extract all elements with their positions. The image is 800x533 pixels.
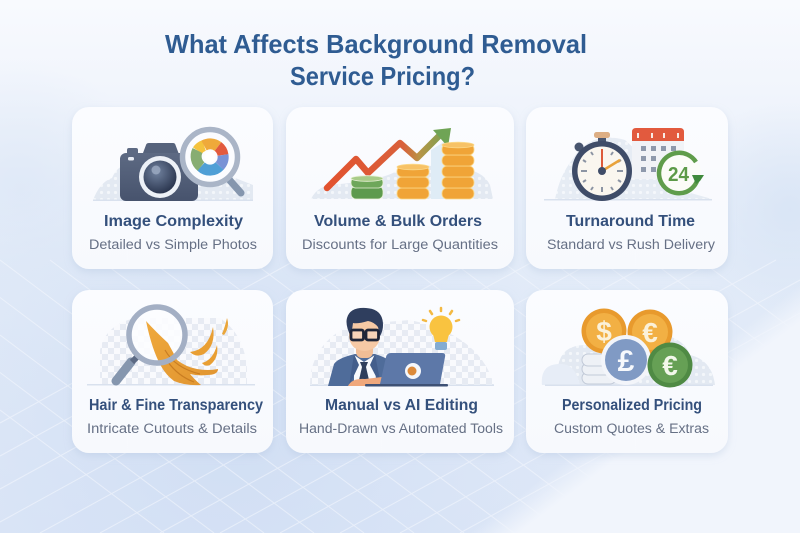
label: Personalized Pricing xyxy=(562,397,702,414)
title: What Affects Background Removal xyxy=(165,29,587,59)
green euro coin: € xyxy=(662,350,678,381)
panel: turnaround time xyxy=(526,107,728,269)
panel: hair and fine transparency xyxy=(72,290,273,453)
pie chart in lens xyxy=(196,144,223,170)
icon: magnifier over hair xyxy=(87,307,255,386)
icon: camera and magnifier xyxy=(93,130,253,201)
tall orange stack xyxy=(442,142,474,199)
label: Image Complexity xyxy=(104,213,243,230)
24 hour badge: 24 xyxy=(668,164,690,186)
lightbulb xyxy=(423,308,459,350)
dollar coin: $ xyxy=(596,316,612,347)
laptop xyxy=(365,353,448,386)
panel: image complexity xyxy=(72,107,273,269)
orange stack xyxy=(397,164,429,199)
description: Discounts for Large Quantities xyxy=(302,237,498,252)
label: Volume & Bulk Orders xyxy=(314,213,482,230)
title xyxy=(165,29,587,91)
panel: volume and bulk orders xyxy=(286,107,514,269)
green stack xyxy=(351,176,383,199)
description: Intricate Cutouts & Details xyxy=(87,421,257,436)
euro coin xyxy=(628,310,672,354)
stopwatch xyxy=(572,132,632,201)
description: Custom Quotes & Extras xyxy=(554,421,709,436)
label: Manual vs AI Editing xyxy=(325,397,478,414)
icon: currency coins xyxy=(542,308,715,388)
description: Standard vs Rush Delivery xyxy=(547,237,715,252)
panel: personalized pricing xyxy=(526,290,728,453)
silver coin stack xyxy=(582,354,616,384)
description: Hand-Drawn vs Automated Tools xyxy=(299,421,503,436)
green euro coin xyxy=(648,342,692,388)
label: Turnaround Time xyxy=(566,213,695,230)
icon: growth arrow and coin stacks xyxy=(311,128,493,199)
description: Detailed vs Simple Photos xyxy=(89,237,257,252)
euro coin: € xyxy=(642,317,658,348)
panel: manual vs AI editing xyxy=(286,290,514,453)
person xyxy=(328,308,395,386)
dollar coin xyxy=(582,308,626,354)
pound coin: £ xyxy=(618,345,635,378)
calendar xyxy=(632,128,684,179)
pound coin xyxy=(601,335,651,385)
label: Hair & Fine Transparency xyxy=(89,397,263,414)
icon: editor at laptop with lightbulb xyxy=(310,308,494,386)
24 hour badge xyxy=(657,151,704,195)
icon: stopwatch, calendar and 24 badge xyxy=(544,128,712,201)
title: Service Pricing? xyxy=(290,61,475,91)
